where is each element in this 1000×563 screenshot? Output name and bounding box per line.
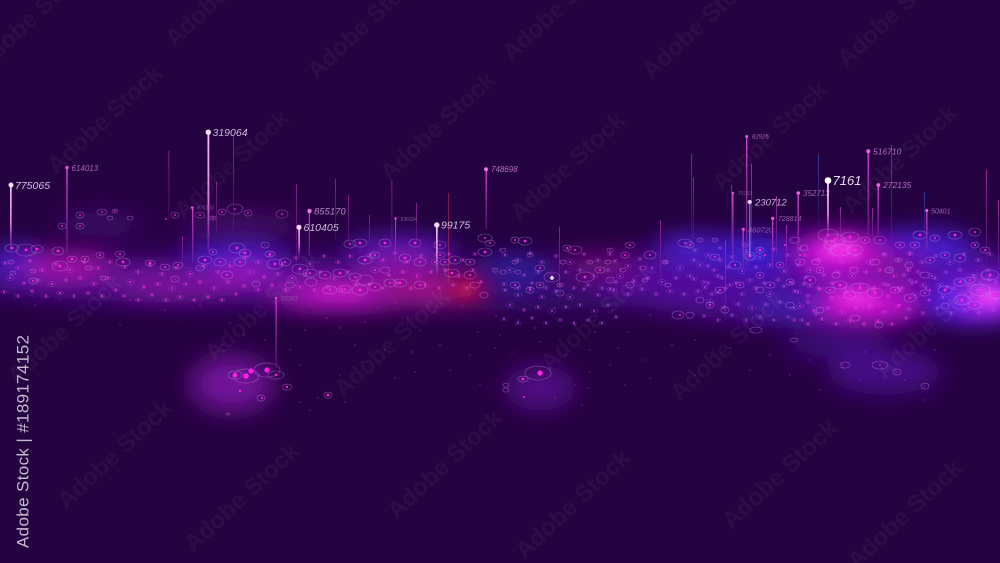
sparse lower dots bbox=[35, 300, 925, 410]
watermark: Adobe Stock repeated: Adobe Stock bbox=[870, 264, 996, 384]
labelled stem: 536024: 536024 bbox=[400, 217, 417, 223]
labelled stem: 352713: 352713 bbox=[803, 189, 830, 198]
watermark: Adobe Stock repeated: Adobe Stock bbox=[510, 444, 636, 563]
labelled stem: 75193: 75193 bbox=[738, 191, 752, 197]
labelled stem: 728814: 728814 bbox=[778, 216, 801, 223]
glow clouds: data terrain bbox=[0, 212, 1000, 412]
watermark: Adobe Stock repeated: Adobe Stock bbox=[717, 414, 843, 534]
watermark: Adobe Stock repeated: Adobe Stock bbox=[375, 66, 501, 186]
labelled stem: 272135 bbox=[876, 180, 912, 235]
labelled stem: 460720: 460720 bbox=[748, 226, 774, 234]
labelled stem: 319064: 319064 bbox=[212, 127, 248, 139]
watermark: Adobe Stock repeated: Adobe Stock bbox=[179, 437, 305, 557]
watermark: Adobe Stock repeated: Adobe Stock bbox=[837, 99, 963, 219]
labelled stem: 99175 bbox=[434, 220, 470, 275]
labelled stem: 82926 bbox=[745, 134, 769, 266]
labelled stem: 460720 bbox=[742, 226, 774, 269]
labelled stem: 610405 bbox=[296, 222, 339, 257]
labelled stem: 230712 bbox=[748, 198, 787, 257]
data points bbox=[10, 209, 995, 386]
labelled stem: 319064 bbox=[206, 127, 248, 250]
labelled stem: 536024 bbox=[394, 217, 417, 263]
labelled stem: 7161 bbox=[825, 173, 861, 236]
watermark: Adobe Stock repeated: Adobe Stock bbox=[535, 256, 661, 376]
labelled stem: 728814 bbox=[771, 216, 801, 268]
watermark: Adobe Stock repeated: Adobe Stock bbox=[707, 76, 833, 196]
labelled stem: 75193 bbox=[732, 191, 752, 263]
watermark: Adobe Stock repeated: Adobe Stock bbox=[505, 106, 631, 226]
labelled stem: 99175: 99175 bbox=[441, 220, 470, 232]
watermark: Adobe Stock repeated: Adobe Stock bbox=[42, 59, 168, 179]
labelled stem: 50401: 50401 bbox=[931, 208, 951, 216]
labelled stem: 876193 bbox=[191, 206, 214, 262]
watermark: Adobe Stock repeated: Adobe Stock bbox=[329, 282, 455, 402]
labelled stem: 610405: 610405 bbox=[304, 222, 339, 234]
thin background stems bbox=[168, 135, 999, 320]
data rings bbox=[5, 204, 1000, 415]
labelled stem: 516710 bbox=[866, 146, 902, 236]
labelled stem: 775065 bbox=[8, 180, 50, 250]
labelled stem: 748698 bbox=[484, 165, 518, 229]
labelled stem: 230712: 230712 bbox=[754, 198, 787, 208]
labelled stem: 516710: 516710 bbox=[873, 146, 902, 156]
labelled stem: 748698: 748698 bbox=[491, 165, 518, 174]
labelled stem: 855170: 855170 bbox=[314, 206, 346, 218]
labelled stem: 28283: 28283 bbox=[280, 296, 298, 302]
labelled stem: 352713 bbox=[796, 189, 830, 258]
labelled stem: 775065: 775065 bbox=[15, 180, 50, 192]
small data ring clusters bbox=[1, 247, 1000, 326]
labelled stem: 28283 bbox=[275, 296, 298, 368]
watermark: Adobe Stock repeated: Adobe Stock bbox=[169, 104, 295, 224]
labelled stem: 272135: 272135 bbox=[882, 180, 912, 190]
watermark: Adobe Stock repeated: Adobe Stock bbox=[665, 286, 791, 406]
labelled stem: 7161: 7161 bbox=[832, 173, 861, 188]
watermark: Adobe Stock repeated: Adobe Stock bbox=[2, 269, 128, 389]
labelled stem: 876193: 876193 bbox=[197, 206, 214, 212]
labelled stem: 614013: 614013 bbox=[72, 164, 99, 173]
labelled stem: 855170 bbox=[307, 206, 346, 256]
labelled stem: 614013 bbox=[65, 164, 99, 252]
watermark: Adobe Stock repeated: Adobe Stock bbox=[52, 394, 178, 514]
lower glow nodes bbox=[233, 367, 543, 399]
bright white node bbox=[550, 276, 554, 280]
watermark: Adobe Stock repeated: Adobe Stock bbox=[382, 404, 508, 524]
stock credit and image id: Adobe Stock | #189174152 bbox=[14, 335, 32, 548]
watermark: Adobe Stock repeated: Adobe Stock bbox=[200, 246, 326, 366]
labelled stem: 50401 bbox=[925, 208, 951, 250]
labelled stem: 82926: 82926 bbox=[752, 134, 769, 140]
